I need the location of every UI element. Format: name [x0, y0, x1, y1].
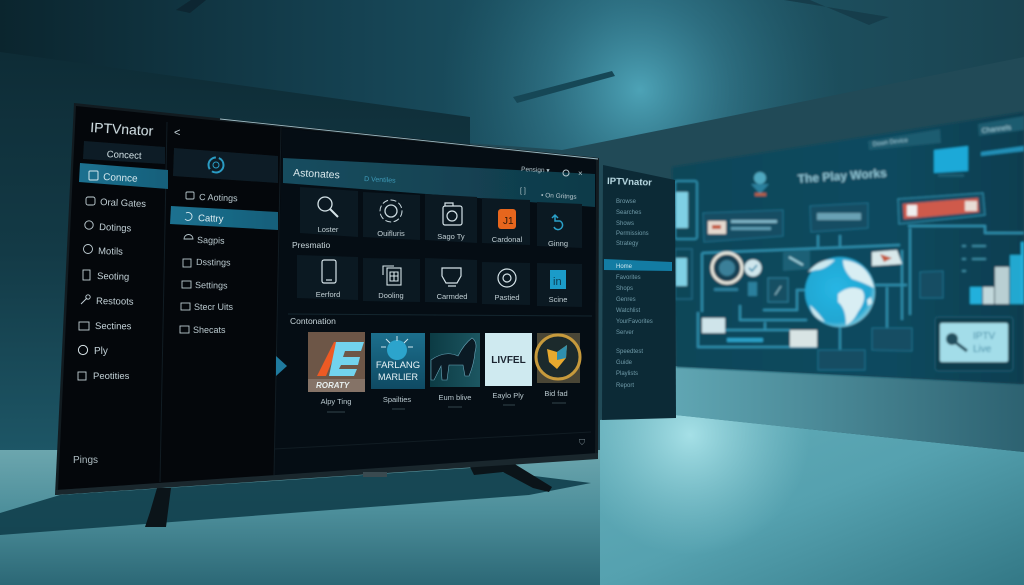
bottom photo tiles: [702, 318, 817, 347]
icon: monitor: [934, 146, 968, 177]
header controls: Pensign ▾: [521, 166, 551, 175]
row one labels: Ouifluris: [377, 229, 405, 238]
TV brand badge: [363, 472, 387, 477]
row two labels: [316, 290, 567, 304]
top label chips: [868, 116, 1024, 156]
blurred menu rows: Playlists: [616, 371, 638, 377]
blurred menu rows: Permissions: [616, 231, 649, 237]
connect button: Concect: [106, 149, 142, 162]
row two labels: Scine: [549, 295, 567, 304]
blurred menu rows: Genres: [616, 297, 636, 303]
icon: camera: [443, 203, 462, 225]
diagram title: The Play Works: [797, 166, 887, 186]
row one labels: [318, 225, 568, 248]
info box: [703, 210, 783, 242]
blurred menu rows: Server: [616, 330, 634, 336]
icon: magnifier: [318, 197, 338, 217]
thumbnail 3: [430, 333, 480, 387]
top label chips: Channels: [981, 124, 1012, 135]
connect button: [83, 141, 165, 164]
screen callout with key icon: [935, 317, 1013, 371]
menu items: Oral Gates: [100, 197, 146, 210]
red alert box: [898, 193, 985, 224]
row one tiles: [292, 187, 582, 250]
blurred menu rows: Report: [616, 383, 634, 389]
carousel arrow: [276, 356, 287, 376]
row two tiles: [297, 255, 582, 307]
active row: Cattry: [198, 213, 224, 225]
thumbnail captions: Eum blive: [439, 393, 471, 402]
menu items: Settings: [195, 280, 228, 291]
top label chips: Down Device: [873, 138, 909, 148]
menu items: Sectines: [95, 321, 132, 332]
bar chart: [962, 242, 1024, 304]
row one labels: Sago Ty: [437, 232, 465, 241]
primary sidebar: [73, 141, 168, 466]
menu items: Dotings: [99, 222, 132, 234]
header tab: D Ventiles: [364, 176, 396, 185]
menu items: Dsstings: [196, 257, 231, 268]
logo card: [173, 148, 278, 183]
thumbnail 2: FARLANG: [376, 360, 420, 371]
blurred menu rows: Home: [616, 264, 633, 270]
thumbnail 2: [371, 333, 425, 389]
TV app title: IPTVnator: [90, 119, 154, 139]
left preview panels: [675, 181, 697, 299]
menu items: C Aotings: [199, 192, 238, 203]
thumbnail 1: RORATY: [316, 381, 350, 390]
thumbnail captions: Alpy Ting: [321, 397, 351, 406]
header controls: [ ]: [520, 188, 526, 195]
icon: tablet: [322, 260, 336, 283]
menu items: Stecr Uits: [194, 302, 234, 312]
secondary sidebar panel: [602, 165, 676, 420]
row two labels: Eerford: [316, 290, 340, 299]
row one labels: Ginng: [548, 239, 568, 248]
thumbnail 2: MARLIER: [378, 372, 419, 382]
menu items: Peotities: [93, 371, 130, 382]
menu items: [78, 197, 146, 382]
sidebar dividers: [160, 122, 591, 482]
map tile: [872, 250, 902, 266]
TV stand: [145, 463, 552, 527]
blurred menu rows: Guide: [616, 360, 633, 366]
thumbnail captions: Spailties: [383, 395, 411, 404]
section divider and heading: Contonation: [290, 316, 336, 326]
icon: ring: [380, 200, 402, 222]
row label: Presmatio: [292, 240, 331, 250]
blurred menu rows: [616, 199, 653, 389]
corner glyph: ⛉: [579, 438, 585, 447]
menu items: Restoots: [96, 296, 134, 308]
menu items: Seoting: [97, 271, 129, 283]
ceiling light strips: [176, 0, 889, 103]
info box: [810, 203, 868, 232]
icon: calendar: [383, 266, 401, 285]
blurred menu rows: Watchlist: [616, 308, 640, 314]
active row: [79, 163, 168, 189]
icon: orange app: [498, 209, 516, 229]
icon: globe: [805, 257, 875, 327]
status badges: [712, 253, 762, 296]
icon: presenter: [751, 172, 769, 196]
back chevron: <: [174, 127, 180, 139]
active row: Connce: [103, 172, 138, 185]
menu items: Motils: [98, 246, 123, 258]
row two labels: Carmded: [437, 292, 467, 301]
thumbnail captions: [321, 389, 568, 406]
menu items: Ply: [94, 346, 108, 357]
menu items: Shecats: [193, 325, 226, 335]
header controls: ×: [578, 169, 583, 178]
header controls: [520, 166, 583, 201]
header controls: ▪ On Gritngs: [541, 192, 577, 201]
screen callout with key icon: Live: [973, 344, 992, 355]
icon: orange app: J1: [503, 216, 514, 227]
secondary panel title: IPTVnator: [607, 176, 652, 189]
blurred menu rows: Searches: [616, 210, 641, 216]
main header bar: [283, 158, 595, 207]
menu items: [180, 192, 238, 335]
row one labels: Cardonal: [492, 235, 523, 244]
header title: Astonates: [293, 167, 340, 181]
blurred menu rows: Favorites: [616, 275, 641, 281]
icon: blue in tile: [550, 270, 566, 289]
TV floor shadow: [0, 468, 591, 535]
small tiles: [768, 250, 810, 302]
projected how-it-works diagram: [672, 112, 1024, 384]
flow connectors: [698, 226, 1024, 350]
blurred menu rows: Strategy: [616, 241, 638, 247]
thumbnails: [308, 332, 580, 412]
highlighted row: [604, 259, 672, 271]
thumbnail captions: Eaylo Ply: [492, 391, 524, 400]
icon: display: [442, 268, 461, 286]
menu items: Sagpis: [197, 235, 225, 246]
lower callout boxes: [818, 271, 943, 370]
thumbnail 4: [485, 333, 532, 386]
thumbnail 4: LIVFEL: [491, 355, 526, 366]
row two labels: Pastied: [494, 293, 520, 302]
blurred menu rows: Speedtest: [616, 349, 643, 355]
screen callout with key icon: IPTV: [973, 331, 996, 342]
icon: blue hook: [552, 215, 563, 230]
thumbnail captions: Bid fad: [544, 389, 568, 398]
icon: blue in tile: in: [553, 276, 562, 288]
icon: round badge: [498, 269, 516, 287]
thumbnail 5: [536, 333, 580, 383]
row one labels: Loster: [318, 225, 339, 234]
blurred menu rows: Shows: [616, 221, 634, 227]
footer label: Pings: [73, 455, 98, 466]
blurred menu rows: Browse: [616, 199, 637, 205]
blurred menu rows: Shops: [616, 286, 633, 292]
active row: [170, 206, 278, 230]
thumbnail 1: [308, 332, 365, 392]
blurred menu rows: YourFavorites: [616, 319, 653, 325]
secondary sidebar: [170, 148, 278, 335]
TV body: [55, 103, 599, 495]
row two labels: Dooling: [378, 291, 404, 300]
